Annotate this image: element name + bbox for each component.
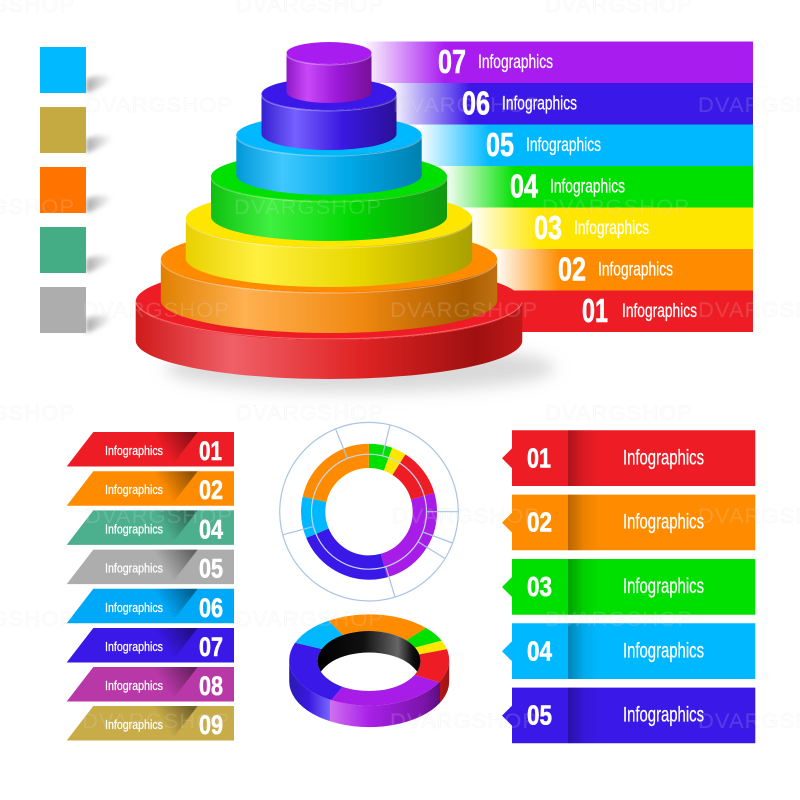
chart: flat donut with guide ring xyxy=(280,422,458,601)
tab 03: Infographics xyxy=(623,575,704,598)
watermarks: DVARGSHOP xyxy=(85,94,233,117)
bar 06 xyxy=(390,83,753,124)
top surface segments xyxy=(289,614,450,706)
label 04 xyxy=(67,510,234,545)
bar 05: 05 xyxy=(486,126,514,163)
tab 02: Infographics xyxy=(623,511,704,534)
bar 04: Infographics xyxy=(550,176,625,198)
bar 02: 02 xyxy=(558,250,586,288)
swatch: grey xyxy=(40,287,86,333)
tab 05 xyxy=(502,688,755,743)
watermarks: DVARGSHOP xyxy=(236,402,384,425)
label 05: Infographics xyxy=(105,561,163,576)
label 04: 04 xyxy=(199,514,223,544)
bar 01: Infographics xyxy=(622,301,697,322)
tier 5 blue xyxy=(236,115,422,195)
label 02: Infographics xyxy=(105,482,163,497)
panel: left slanted labels xyxy=(67,432,234,740)
tab 01 xyxy=(502,430,755,486)
outer wall xyxy=(289,660,449,727)
bar 07 xyxy=(362,42,753,83)
label 01 xyxy=(67,432,234,466)
tier 6 indigo xyxy=(262,78,396,150)
label 02: 02 xyxy=(199,475,223,505)
label 06: Infographics xyxy=(105,600,163,615)
bar 01: 01 xyxy=(582,292,608,329)
tab 04: 04 xyxy=(527,635,552,666)
label 09: 09 xyxy=(199,710,223,740)
bar 05 xyxy=(418,124,753,166)
swatch: gold xyxy=(40,107,86,153)
tab 04: Infographics xyxy=(623,639,704,662)
watermarks: DVARGSHOP xyxy=(392,505,540,528)
watermarks: DVARGSHOP xyxy=(545,402,693,425)
label 06 xyxy=(67,589,234,623)
swatch shadows xyxy=(86,76,114,333)
panel: colour swatches xyxy=(40,47,114,333)
bar 04 xyxy=(444,166,753,208)
tab 04 xyxy=(502,623,755,679)
tab 01: 01 xyxy=(527,442,551,473)
label 09 xyxy=(67,706,234,740)
swatch: teal xyxy=(40,227,86,273)
watermarks: DVARGSHOP xyxy=(234,196,382,219)
watermarks: DVARGSHOP xyxy=(82,710,230,733)
tab 05: Infographics xyxy=(623,704,704,727)
label 04: Infographics xyxy=(105,521,163,536)
bar 03: Infographics xyxy=(574,218,649,239)
tab 05: 05 xyxy=(527,700,552,731)
guide rings and spokes xyxy=(280,422,458,601)
label 06: 06 xyxy=(199,593,223,623)
bar 06: 06 xyxy=(462,84,490,122)
bar 05: Infographics xyxy=(526,135,601,156)
tab 01: Infographics xyxy=(623,446,704,469)
donut segments xyxy=(313,456,425,568)
hole opening xyxy=(321,652,417,691)
tab 02: 02 xyxy=(527,507,552,538)
watermarks: DVARGSHOP xyxy=(236,608,384,631)
chart: stacked cylinder pyramid xyxy=(136,42,522,379)
label 08: Infographics xyxy=(105,678,163,693)
label 05: 05 xyxy=(199,554,223,584)
label 05 xyxy=(67,550,234,584)
watermarks: DVARGSHOP xyxy=(393,94,541,117)
bar 03: 03 xyxy=(534,209,562,246)
swatch: orange xyxy=(40,167,86,213)
tier 3 yellow xyxy=(186,190,472,287)
label 07: Infographics xyxy=(105,639,163,654)
bar 02: Infographics xyxy=(598,260,673,280)
tier 2 orange xyxy=(161,227,497,333)
watermarks: DVARGSHOP xyxy=(390,710,538,733)
bar 07: Infographics xyxy=(478,52,553,73)
bar 02 xyxy=(495,249,753,290)
pyramid ground shadow xyxy=(165,344,555,392)
watermarks: DVARGSHOP xyxy=(85,505,233,528)
watermarks: DVARGSHOP xyxy=(390,299,538,322)
panel: right tab labels xyxy=(502,430,755,743)
tier 1 red xyxy=(136,263,522,379)
panel: pyramid label bars xyxy=(362,42,753,332)
tier 4 green xyxy=(211,152,447,241)
label 01: 01 xyxy=(199,436,222,466)
label 07 xyxy=(67,628,234,662)
tab 03: 03 xyxy=(527,571,552,602)
label 01: Infographics xyxy=(105,443,163,458)
label 09: Infographics xyxy=(105,717,163,732)
chart: 3D donut xyxy=(289,614,450,728)
label 08: 08 xyxy=(199,671,223,701)
watermarks: DVARGSHOP xyxy=(82,299,230,322)
watermarks: DVARGSHOP xyxy=(545,608,693,631)
tier 7 purple xyxy=(286,42,372,103)
bar 01 xyxy=(500,290,753,332)
tab 02 xyxy=(502,495,755,550)
bar 04: 04 xyxy=(510,168,538,204)
bar 03 xyxy=(470,208,753,249)
tab 03 xyxy=(502,559,755,615)
bar 07: 07 xyxy=(438,43,466,80)
label 02 xyxy=(67,471,234,506)
swatch: cyan xyxy=(40,47,86,93)
hole inner wall xyxy=(318,631,420,691)
bar 06: Infographics xyxy=(502,94,577,114)
label 07: 07 xyxy=(199,632,223,662)
label 08 xyxy=(67,667,234,702)
watermarks: DVARGSHOP xyxy=(542,196,690,219)
